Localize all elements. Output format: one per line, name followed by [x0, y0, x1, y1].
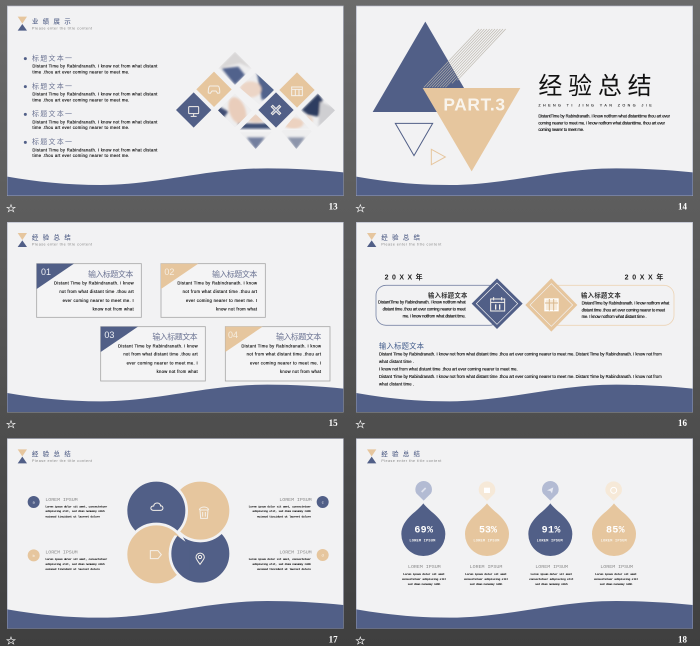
- drop 91%: LOREM IPSUM: [537, 540, 563, 544]
- heading: slide 17: 经验总结: [32, 449, 71, 458]
- item bottom right: euismod tincidunt ut laoreet dolore: [257, 567, 311, 571]
- slide number: 18: [678, 634, 687, 644]
- text block: what distant time .: [379, 382, 414, 387]
- drop 53%: 53%: [479, 524, 497, 535]
- card 04: 04: [228, 330, 238, 340]
- text list: 标题文本一: [32, 137, 72, 146]
- text block: what distant time .: [379, 359, 414, 364]
- drop 69%: consectetuer adipiscing elit: [402, 577, 446, 581]
- slide number: 17: [329, 634, 338, 644]
- item bottom left: Lorem ipsum dolor sit amet, consectetuer: [45, 557, 108, 561]
- card 02: [161, 264, 265, 317]
- drop 91%: [528, 481, 574, 586]
- left callout: [376, 285, 499, 325]
- text list: 标题文本一: [32, 109, 72, 118]
- drop 85%: 85%: [606, 524, 625, 535]
- item bottom right: adipiscing elit, sed diam nonummy nibh: [252, 562, 311, 566]
- text block: Distant Time by Rabindranath. I know not from what distant time .thou art ever coming nearer to meet me. Distant Time by Rabindranath. I know not from: [379, 352, 662, 357]
- text list: Distant Time by Rabindranath. I know not from what distant: [32, 119, 158, 124]
- item top right: Lorem ipsum dolor sit amet, consectetuer: [249, 504, 311, 508]
- slide number: 13: [329, 201, 338, 211]
- drop 53%: sed diam nonummy nibh: [470, 582, 503, 586]
- text block: I know not from what distant time .thou art ever coming nearer to meet me.: [379, 367, 518, 372]
- drop 53%: LOREM IPSUM: [473, 540, 500, 544]
- icon: star: [356, 421, 364, 428]
- card 01: know not from what: [93, 306, 135, 311]
- panel: slide 13 performance display: [7, 6, 343, 212]
- item top left: LOREM IPSUM: [45, 497, 78, 503]
- heading: slide 17: [18, 449, 92, 463]
- card 03: not from what distant time .thou art: [123, 352, 199, 357]
- heading: slide 17: Please enter the title content: [32, 459, 92, 463]
- drop 53%: LOREM IPSUM: [470, 564, 502, 570]
- text list: time .thou art ever coming nearer to meet me.: [32, 69, 129, 74]
- card 01: Distant Time by Rabindranath. I know: [54, 280, 135, 285]
- title block: coming nearer to meet me.: [538, 127, 584, 132]
- heading: slide 18: 经验总结: [381, 449, 420, 458]
- card 03: know not from what: [157, 369, 199, 374]
- heading: slide 13: [18, 16, 92, 31]
- geometric triangles: [373, 22, 520, 171]
- left callout: me. I know notfrom what distant time.: [403, 313, 466, 318]
- card 04: know not from what: [280, 369, 322, 374]
- icon diamond: calendar: [472, 278, 523, 329]
- panel: slide 16 timeline diamonds: [356, 222, 693, 428]
- card 04: 输入标题文本: [276, 331, 321, 341]
- item top left: euismod tincidunt ut laoreet dolore: [45, 514, 100, 518]
- icon: cloud: [151, 503, 163, 510]
- drop 91%: LOREM IPSUM: [535, 564, 568, 570]
- heading: slide 16: 经验总结: [381, 233, 420, 242]
- text block: [379, 341, 662, 387]
- icon: tag: [150, 551, 161, 559]
- text list: Distant Time by Rabindranath. I know not from what distant: [32, 147, 158, 152]
- interlocking circles: [126, 480, 231, 585]
- item top right: LOREM IPSUM: [279, 497, 312, 503]
- item bottom left: adipiscing elit, sed diam nonummy nibh: [45, 562, 105, 566]
- drop 85%: consectetuer adipiscing elit: [594, 577, 638, 581]
- card 03: 输入标题文本: [152, 331, 198, 341]
- right callout: 输入标题文本: [581, 291, 621, 300]
- right callout: me. I know notfrom what distant time .: [582, 314, 647, 319]
- item bottom right: Lorem ipsum dolor sit amet, consectetuer: [249, 557, 311, 561]
- drop 69%: Lorem ipsum dolor sit amet: [403, 572, 445, 576]
- drop 91%: sed diam nonummy nibh: [535, 582, 568, 586]
- card 01: [37, 264, 141, 317]
- card 02: 02: [164, 267, 174, 277]
- drop 53%: consectetuer adipiscing elit: [464, 577, 508, 581]
- card 02: ever coming nearer to meet me. I: [186, 298, 257, 303]
- drop 69%: [401, 481, 446, 586]
- heading: slide 15: 经验总结: [32, 233, 71, 242]
- year labels: 20XX年: [625, 272, 663, 281]
- left callout: 输入标题文本: [428, 291, 468, 300]
- item top right: euismod tincidunt ut laoreet dolore: [257, 514, 311, 518]
- card 04: Distant Time by Rabindranath. I know: [241, 343, 322, 348]
- slide number: 14: [678, 201, 687, 211]
- item bottom right: LOREM IPSUM: [279, 550, 312, 556]
- text list: time .thou art ever coming nearer to meet me.: [32, 153, 129, 158]
- card 02: not from what distant time .thou art: [183, 289, 258, 294]
- card 03: Distant Time by Rabindranath. I know: [118, 343, 199, 348]
- icon: star: [7, 421, 15, 428]
- icon: star: [356, 205, 364, 212]
- icon diamond: monitor: [176, 92, 211, 128]
- drop 69%: LOREM IPSUM: [408, 564, 441, 570]
- item top left: a: [33, 501, 36, 505]
- text list: 标题文本一: [32, 53, 72, 62]
- item bottom left: LOREM IPSUM: [45, 550, 78, 556]
- year labels: 20XX年: [385, 272, 423, 281]
- icon: star: [7, 205, 15, 212]
- photo diamonds: [218, 52, 335, 149]
- drop 69%: sed diam nonummy nibh: [408, 582, 441, 586]
- item bottom left: b: [33, 554, 35, 558]
- text list: 标题文本一: [32, 81, 72, 90]
- item top left: adipiscing elit, sed diam nonummy nibh: [45, 509, 105, 513]
- item top left: Lorem ipsum dolor sit amet, consectetuer: [45, 504, 108, 508]
- title block: 经验总结: [538, 73, 652, 100]
- item top left: [28, 496, 108, 518]
- drop 85%: [592, 481, 638, 586]
- icon: trash: [199, 507, 209, 518]
- heading: slide 16: Please enter the title content: [381, 243, 441, 247]
- drop 53%: [464, 481, 509, 586]
- heading: slide 15: [18, 233, 92, 247]
- card 03: [101, 327, 205, 381]
- panel: slide 18 percentage drops: [356, 439, 693, 644]
- drop 85%: sed diam nonummy nibh: [600, 582, 633, 586]
- year labels: [385, 272, 663, 281]
- right callout: distant time .thou art ever coming nearer to meet: [582, 307, 666, 312]
- drop 91%: Lorem ipsum dolor sit amet: [530, 572, 572, 576]
- card 01: not from what distant time .thou art: [59, 289, 135, 294]
- card 02: 输入标题文本: [212, 269, 257, 279]
- heading: slide 13: Please enter the title content: [32, 26, 92, 30]
- drop 69%: 69%: [414, 524, 433, 535]
- icon diamond: calendar: [279, 72, 315, 108]
- item bottom left: [28, 549, 108, 571]
- drop 85%: Lorem ipsum dolor sit amet: [595, 572, 637, 576]
- drop 91%: consectetuer adipiscing elit: [529, 577, 574, 581]
- icon diamond: books: [525, 278, 577, 332]
- heading: slide 18: Please enter the title content: [381, 459, 441, 463]
- item bottom left: euismod tincidunt ut laoreet dolore: [45, 567, 100, 571]
- card 03: ever coming nearer to meet me. I: [127, 361, 198, 366]
- item bottom right: d: [322, 554, 324, 558]
- slide number: 15: [329, 418, 338, 428]
- geometric triangles: PART.3: [443, 94, 505, 114]
- card 02: know not from what: [216, 306, 258, 311]
- drop 69%: LOREM IPSUM: [409, 540, 436, 544]
- card 01: ever coming nearer to meet me. I: [63, 298, 134, 303]
- card 04: [225, 327, 330, 381]
- heading: slide 15: Please enter the title content: [32, 243, 92, 247]
- slide number: 16: [678, 418, 687, 428]
- card 03: 03: [104, 330, 114, 340]
- panel: slide 14 section cover: [356, 6, 693, 212]
- text list: [24, 53, 158, 158]
- right callout: [548, 285, 674, 325]
- heading: slide 13: 业绩展示: [32, 16, 71, 25]
- card 04: not from what distant time .thou art: [247, 352, 322, 357]
- heading: slide 18: [367, 449, 441, 463]
- heading: slide 16: [367, 233, 441, 247]
- left callout: distant time .thou art ever coming nearer to meet: [383, 307, 467, 312]
- text list: Distant Time by Rabindranath. I know not from what distant: [32, 91, 158, 96]
- text block: Distant Time by Rabindranath. I know not from what distant time .thou art ever coming nearer to meet me. Distant Time by Rabindranath. I know not from: [379, 374, 662, 379]
- text block: 输入标题文本: [379, 341, 425, 350]
- drop 91%: 91%: [542, 524, 560, 535]
- drop 85%: LOREM IPSUM: [601, 540, 627, 544]
- card 01: 输入标题文本: [88, 269, 133, 279]
- title block: DistantTime by Rabindranath. I know notfrom what distanttime thou art ever: [538, 113, 671, 118]
- text list: Distant Time by Rabindranath. I know not from what distant: [32, 64, 158, 69]
- icon diamond: gamepad: [196, 72, 232, 107]
- title block: [538, 73, 671, 132]
- text list: time .thou art ever coming nearer to meet me.: [32, 97, 129, 102]
- card 01: 01: [41, 267, 51, 277]
- right callout: DistantTime by Rabindranath. I know notfrom what: [582, 300, 670, 305]
- icon: location pin: [196, 553, 204, 564]
- card 02: Distant Time by Rabindranath. I know: [177, 280, 258, 285]
- item top right: c: [322, 501, 324, 505]
- icon diamond: cross tools: [258, 92, 294, 128]
- item top right: adipiscing elit, sed diam nonummy nibh: [252, 509, 311, 513]
- drop 53%: Lorem ipsum dolor sit amet: [465, 572, 507, 576]
- text list: time .thou art ever coming nearer to meet me.: [32, 125, 129, 130]
- title block: ZHENG TI JING YAN ZONG JIE: [538, 104, 652, 108]
- icon: star: [7, 637, 15, 644]
- panel: slide 17 interlocking circles: [7, 439, 343, 644]
- card 04: ever coming nearer to meet me. I: [250, 361, 321, 366]
- title block: coming nearer to meet me. I know notfrom what distanttime. thou art ever: [538, 120, 666, 125]
- item top right: [249, 496, 329, 518]
- drop 85%: LOREM IPSUM: [600, 564, 633, 570]
- icon: star: [356, 637, 364, 644]
- item bottom right: [249, 549, 329, 571]
- left callout: DistantTime by Rabindranath. I know notfrom what: [378, 299, 467, 304]
- panel: slide 15 four boxes: [7, 222, 343, 428]
